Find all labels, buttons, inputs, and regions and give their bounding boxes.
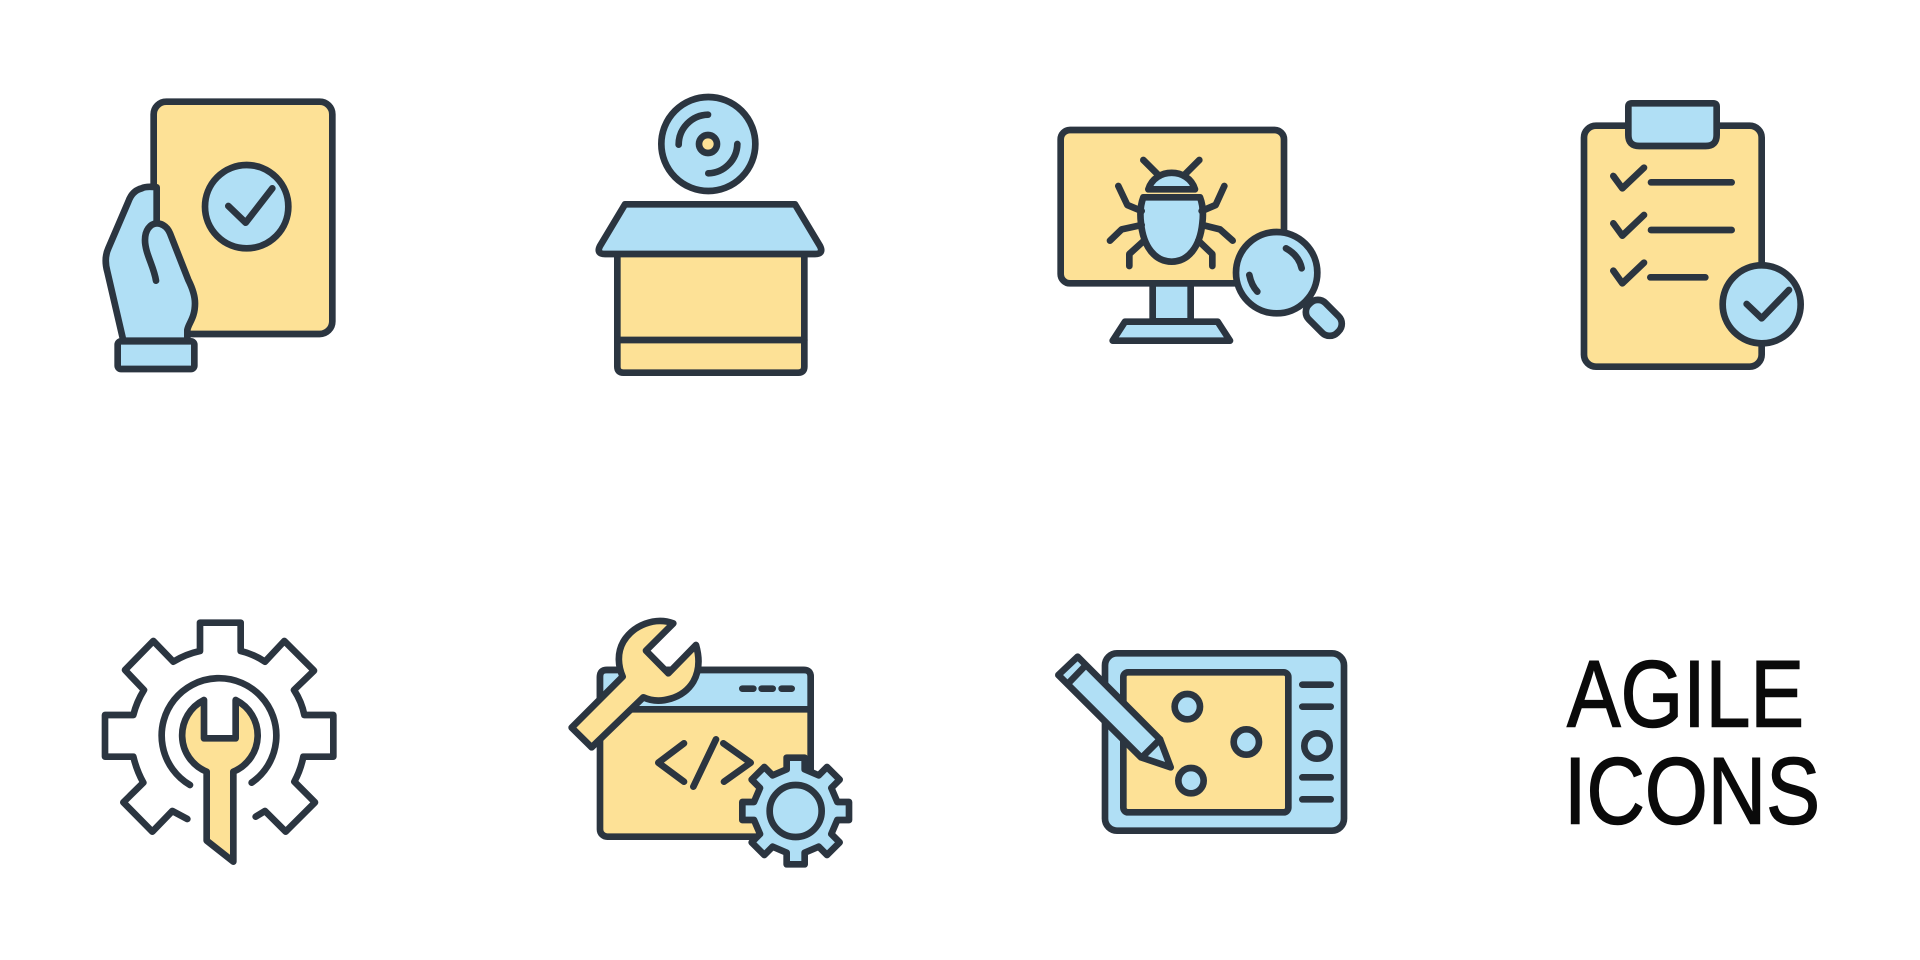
tablet screen bbox=[1123, 672, 1288, 812]
icon: software disc and box bbox=[599, 97, 821, 373]
approval check bbox=[1747, 290, 1789, 318]
document bbox=[154, 102, 332, 334]
bug bbox=[1110, 160, 1233, 266]
icon: gear with wrench bbox=[105, 623, 333, 862]
wrench bbox=[572, 621, 698, 747]
code symbol bbox=[658, 739, 751, 787]
title bbox=[1564, 642, 1820, 844]
window dots bbox=[742, 679, 792, 699]
clip bbox=[1628, 103, 1717, 146]
icon: code window with wrench and gear bbox=[572, 621, 849, 864]
tablet bbox=[1105, 653, 1344, 831]
clipboard bbox=[1584, 126, 1762, 367]
cuff bbox=[118, 341, 194, 369]
side button bbox=[1304, 733, 1330, 759]
icon: checklist clipboard bbox=[1584, 103, 1801, 367]
gear outline bbox=[105, 623, 333, 832]
monitor base bbox=[1113, 322, 1230, 341]
disc bbox=[661, 97, 755, 191]
check badge bbox=[205, 165, 288, 248]
hand bbox=[106, 187, 195, 341]
icon: bug on monitor with magnifier bbox=[1061, 130, 1346, 341]
stylus bands bbox=[1068, 666, 1160, 757]
thumb line bbox=[145, 223, 157, 281]
window bbox=[600, 670, 811, 837]
stylus bbox=[1058, 657, 1171, 767]
checklist items bbox=[1613, 168, 1732, 283]
title bar bbox=[600, 670, 811, 709]
approval badge bbox=[1723, 265, 1801, 343]
box flap bbox=[599, 204, 821, 254]
gear bbox=[742, 758, 849, 864]
screen dots bbox=[1175, 694, 1259, 793]
check mark bbox=[228, 188, 272, 223]
inner ring bbox=[162, 678, 276, 785]
title: AGILE bbox=[1567, 642, 1804, 748]
box band bbox=[617, 330, 804, 350]
side controls bbox=[1302, 685, 1331, 799]
disc glints bbox=[679, 115, 737, 173]
disc hub bbox=[699, 135, 717, 153]
monitor stand bbox=[1153, 283, 1191, 321]
icon: drawing tablet with stylus bbox=[1058, 653, 1344, 831]
icon: hand holding approved document bbox=[106, 102, 332, 369]
magnifier bbox=[1236, 232, 1346, 340]
monitor screen bbox=[1061, 130, 1284, 283]
wrench bbox=[182, 700, 258, 862]
title: ICONS bbox=[1564, 738, 1820, 844]
box body bbox=[617, 254, 804, 373]
